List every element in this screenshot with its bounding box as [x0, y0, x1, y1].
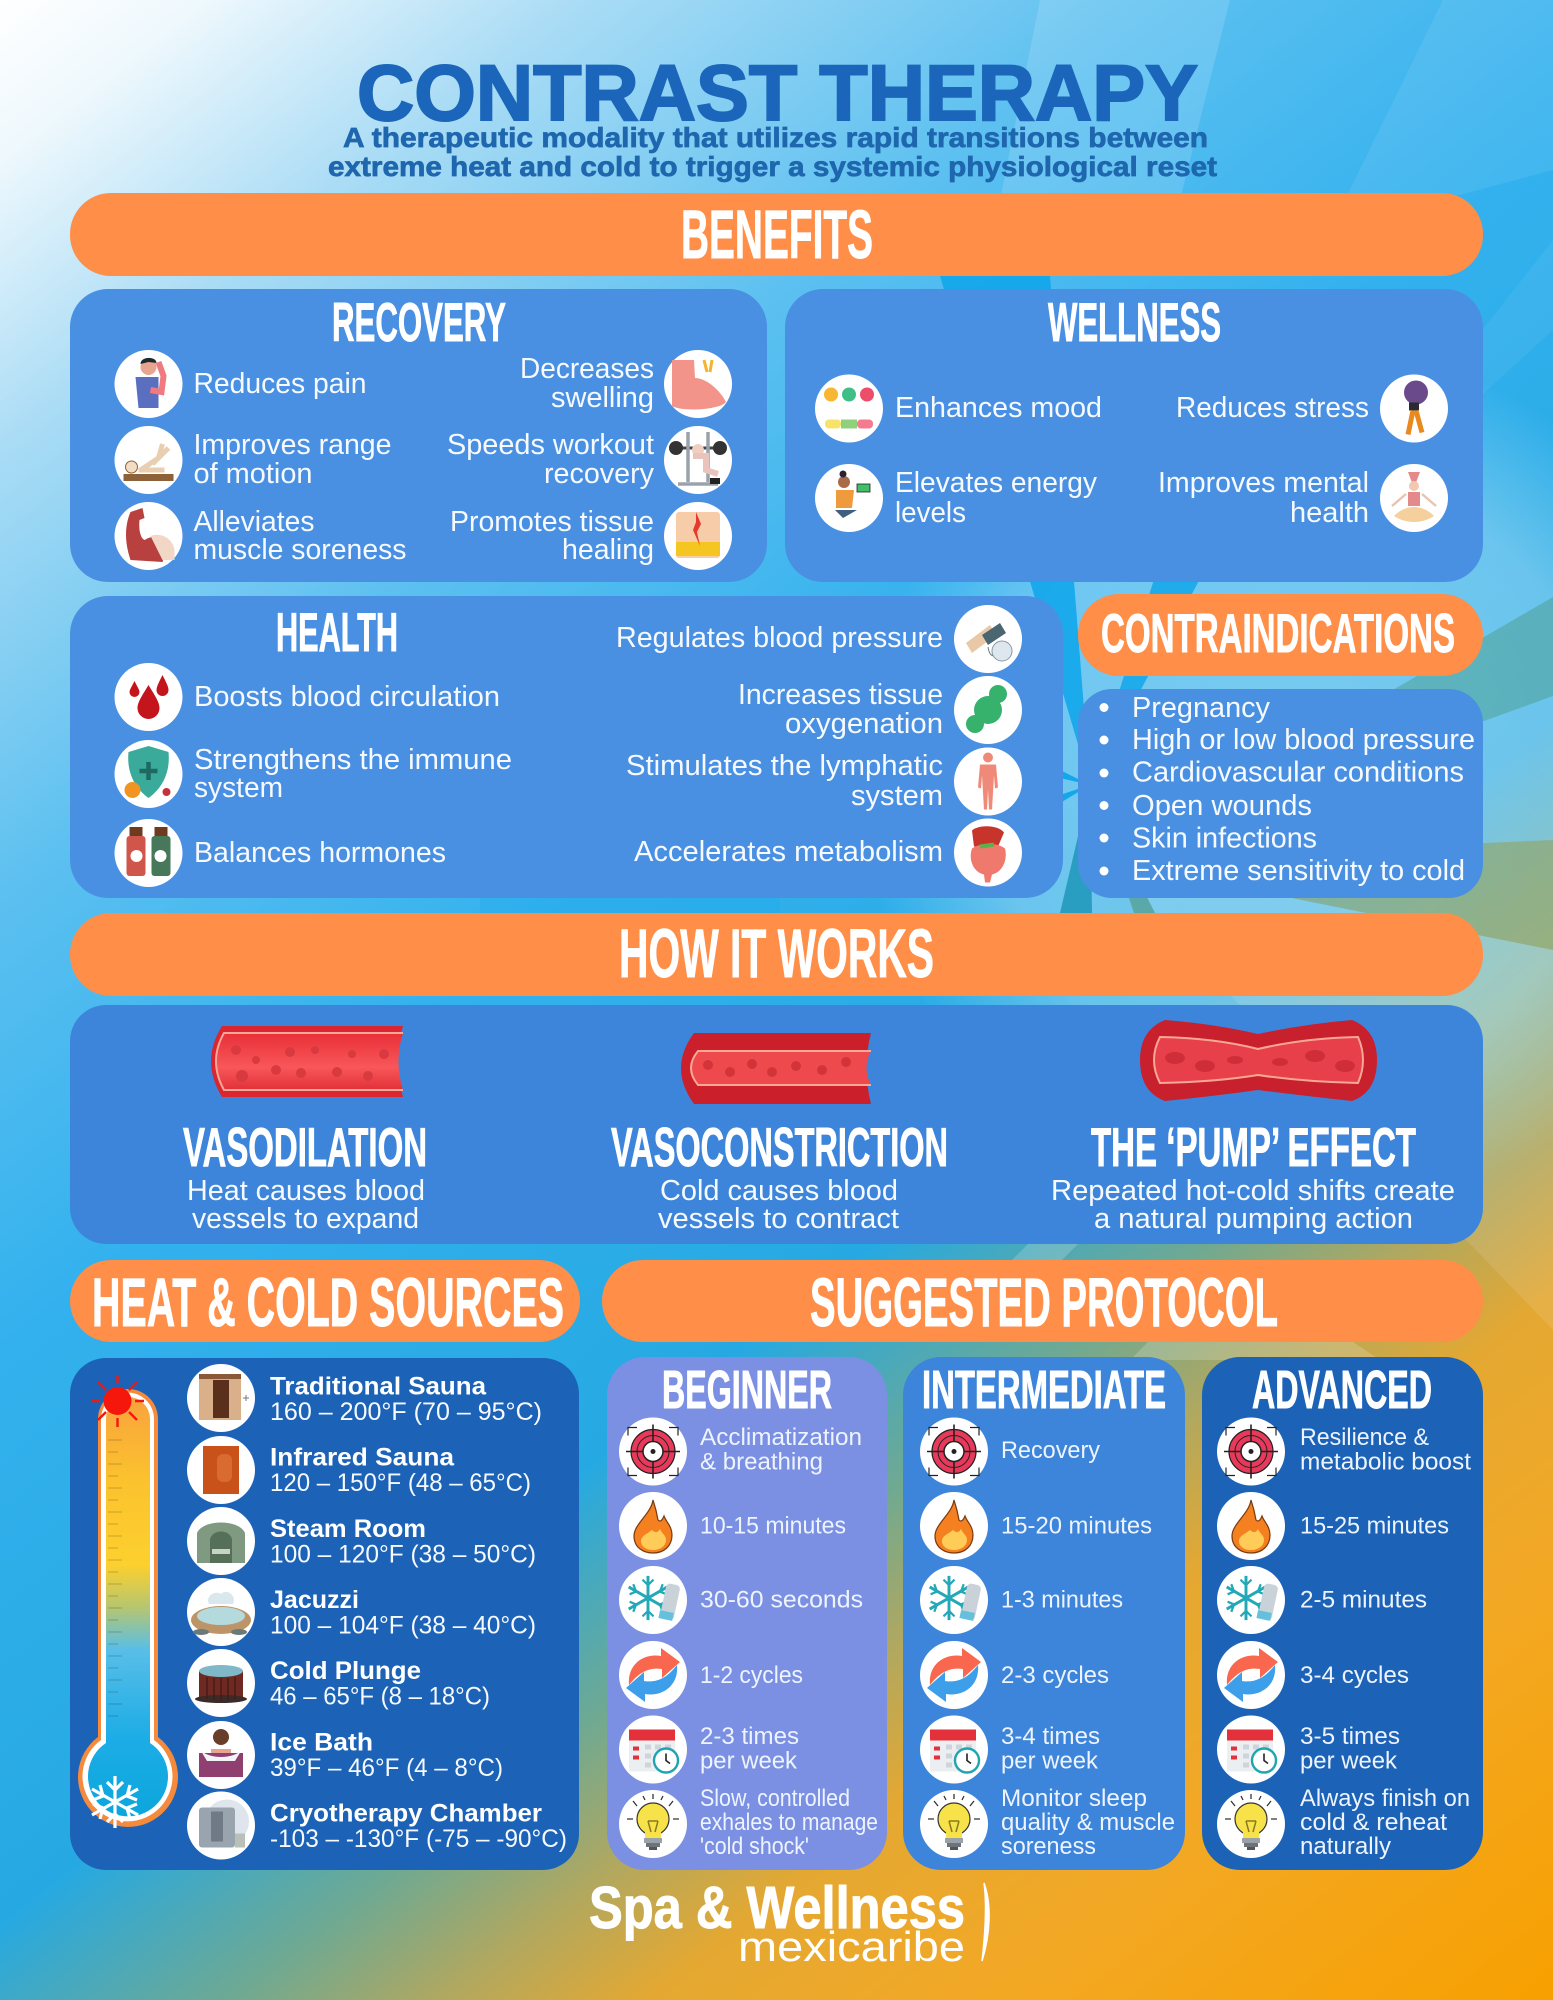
item: cryotherapy chamber: Cryotherapy Chamber	[270, 1800, 542, 1828]
item: ice bath: 39°F – 46°F (4 – 8°C)	[270, 1754, 503, 1782]
column: vasodilation: Heat causes blood	[187, 1175, 425, 1207]
item: promotes tissue healing	[450, 502, 732, 570]
item: decreases swelling: Decreases	[520, 353, 654, 385]
text column: advanced: 3-5 times	[1300, 1723, 1400, 1750]
panel: beginner protocol	[607, 1357, 887, 1870]
item: decreases swelling	[520, 350, 732, 418]
logo: Spa & Wellness	[589, 1875, 965, 1941]
item: improves mental health: health	[1290, 497, 1369, 529]
panel: advanced protocol	[1202, 1357, 1483, 1870]
panel: contraindications list: High or low blood pressure	[1132, 724, 1475, 756]
text column: beginner: 30-60 seconds	[700, 1586, 863, 1614]
item: infrared sauna	[187, 1436, 531, 1504]
text column: beginner: Slow, controlled	[700, 1785, 850, 1812]
panel: health	[70, 596, 1063, 898]
panel: contraindications list: Extreme sensitivity to cold	[1132, 855, 1465, 887]
text column: advanced: cold & reheat	[1300, 1809, 1447, 1836]
panel: contraindications list: Cardiovascular conditions	[1132, 756, 1464, 788]
text column: intermediate: quality & muscle	[1001, 1809, 1175, 1836]
item: reduces stress: Reduces stress	[1176, 392, 1369, 424]
item: reduces stress	[1176, 374, 1448, 442]
subtitle: extreme heat and cold to trigger a systemic physiological reset	[328, 151, 1217, 182]
item: promotes tissue healing: Promotes tissue	[450, 506, 654, 538]
item: alleviates muscle soreness	[114, 502, 406, 570]
illustration: pump effect vessel	[1140, 1020, 1377, 1101]
item: promotes tissue healing: healing	[562, 534, 654, 566]
text column: intermediate: Monitor sleep	[1001, 1785, 1147, 1812]
item: stimulates the lymphatic system: system	[851, 780, 943, 812]
text column: beginner: 1-2 cycles	[700, 1662, 803, 1689]
item: balances hormones	[114, 819, 446, 887]
item: steam room	[187, 1507, 536, 1575]
text column: beginner: 10-15 minutes	[700, 1512, 846, 1540]
item: cold plunge	[187, 1649, 490, 1717]
column: vasoconstriction	[611, 1116, 948, 1235]
icon column: beginner	[619, 1418, 687, 1858]
text column: advanced: Resilience &	[1300, 1424, 1429, 1451]
item: improves range of motion: of motion	[194, 458, 312, 490]
text column: intermediate: per week	[1001, 1748, 1099, 1774]
text column: beginner: & breathing	[700, 1448, 823, 1476]
item: boosts blood circulation	[114, 663, 500, 731]
item: cold plunge: 46 – 65°F (8 – 18°C)	[270, 1682, 490, 1710]
item: decreases swelling: swelling	[551, 382, 654, 414]
heading: wellness: WELLNESS	[1048, 291, 1221, 353]
panel: how it works	[70, 1005, 1483, 1244]
column: vasoconstriction: VASOCONSTRICTION	[611, 1116, 948, 1178]
item: traditional sauna: 160 – 200°F (70 – 95°C)	[270, 1398, 542, 1426]
panel: contraindications list	[1078, 689, 1483, 898]
text column: advanced: metabolic boost	[1300, 1448, 1471, 1476]
banner: heat and cold sources	[70, 1260, 580, 1342]
item: improves range of motion: Improves range	[194, 429, 392, 461]
column: vasoconstriction: Cold causes blood	[660, 1175, 898, 1207]
heading: advanced: ADVANCED	[1252, 1360, 1432, 1420]
item: elevates energy levels: Elevates energy	[895, 467, 1098, 499]
item: elevates energy levels	[815, 464, 1098, 532]
banner: how it works	[70, 913, 1483, 996]
logo	[589, 1875, 989, 1970]
banner: heat and cold sources: HEAT & COLD SOURCES	[92, 1264, 564, 1341]
banner: benefits	[70, 193, 1483, 276]
item: cryotherapy chamber	[187, 1792, 567, 1860]
item: boosts blood circulation: Boosts blood circulation	[194, 681, 500, 713]
item: alleviates muscle soreness: muscle soreness	[194, 534, 406, 566]
item: traditional sauna: Traditional Sauna	[270, 1372, 487, 1400]
thermometer	[78, 1375, 178, 1828]
text column: advanced: Always finish on	[1300, 1785, 1470, 1812]
item: ice bath	[187, 1721, 503, 1789]
text column: intermediate: 1-3 minutes	[1001, 1586, 1123, 1614]
text column: advanced: per week	[1300, 1748, 1398, 1774]
banner: suggested protocol	[602, 1260, 1483, 1342]
heading: recovery: RECOVERY	[332, 291, 506, 353]
subtitle: A therapeutic modality that utilizes rapid transitions between	[343, 122, 1208, 153]
text column: intermediate: soreness	[1001, 1833, 1096, 1860]
illustration: dilated vessel	[211, 1026, 403, 1097]
text column: beginner: 2-3 times	[700, 1723, 799, 1750]
item: stimulates the lymphatic system	[626, 748, 1022, 816]
item: jacuzzi: Jacuzzi	[270, 1586, 359, 1614]
heading: intermediate: INTERMEDIATE	[922, 1360, 1166, 1420]
panel: heat and cold sources	[70, 1358, 579, 1870]
text column: intermediate: 15-20 minutes	[1001, 1512, 1152, 1540]
subtitle	[328, 122, 1217, 182]
text column: beginner: 'cold shock'	[700, 1833, 809, 1860]
text column: advanced	[1300, 1424, 1471, 1860]
item: speeds workout recovery	[447, 426, 732, 494]
title: CONTRAST THERAPY	[357, 48, 1198, 137]
item: increases tissue oxygenation: oxygenation	[785, 708, 943, 740]
item: traditional sauna	[187, 1364, 542, 1432]
panel: contraindications list: Skin infections	[1132, 822, 1317, 854]
item: steam room: 100 – 120°F (38 – 50°C)	[270, 1540, 536, 1568]
item: regulates blood pressure	[616, 605, 1022, 673]
column: pump effect: Repeated hot-cold shifts create	[1051, 1175, 1455, 1207]
item: regulates blood pressure: Regulates blood pressure	[616, 622, 943, 654]
item: increases tissue oxygenation: Increases tissue	[738, 679, 943, 711]
item: cryotherapy chamber: -103 – -130°F (-75 – -90°C)	[270, 1825, 567, 1853]
panel: contraindications list: Open wounds	[1132, 790, 1312, 822]
item: strengthens the immune system: Strengthens the immune	[194, 744, 512, 776]
text column: intermediate: 3-4 times	[1001, 1723, 1100, 1750]
column: vasodilation: vessels to expand	[192, 1203, 419, 1235]
text column: intermediate: 2-3 cycles	[1001, 1662, 1109, 1689]
icon: sun	[91, 1375, 144, 1427]
icon column: advanced	[1217, 1418, 1285, 1858]
logo: mexicaribe	[738, 1923, 965, 1970]
column: vasodilation	[183, 1116, 427, 1235]
item: jacuzzi	[187, 1578, 536, 1646]
item: improves mental health	[1158, 464, 1448, 532]
item: balances hormones: Balances hormones	[194, 837, 446, 869]
item: accelerates metabolism	[634, 818, 1022, 886]
item: stimulates the lymphatic system: Stimulates the lymphatic	[626, 750, 943, 782]
banner: how it works: HOW IT WORKS	[619, 915, 934, 992]
panel: wellness	[785, 289, 1483, 582]
panel: contraindications list: Pregnancy	[1132, 692, 1271, 724]
text column: beginner	[700, 1424, 878, 1860]
text column: beginner: Acclimatization	[700, 1424, 862, 1451]
text column: advanced: 2-5 minutes	[1300, 1586, 1427, 1614]
icon: snowflake	[92, 1776, 138, 1828]
item: speeds workout recovery: recovery	[544, 458, 655, 490]
item: infrared sauna: 120 – 150°F (48 – 65°C)	[270, 1469, 531, 1497]
column: pump effect	[1051, 1116, 1455, 1235]
item: reduces pain: Reduces pain	[194, 368, 366, 400]
item: cold plunge: Cold Plunge	[270, 1657, 421, 1685]
heading: health: HEALTH	[276, 601, 398, 663]
item: elevates energy levels: levels	[895, 497, 966, 529]
item: accelerates metabolism: Accelerates metabolism	[634, 836, 943, 868]
illustration: constricted vessel	[681, 1033, 871, 1104]
item: infrared sauna: Infrared Sauna	[270, 1444, 455, 1472]
text column: intermediate: Recovery	[1001, 1437, 1100, 1464]
text column: advanced: 15-25 minutes	[1300, 1512, 1449, 1540]
item: alleviates muscle soreness: Alleviates	[194, 506, 314, 538]
column: vasoconstriction: vessels to contract	[658, 1203, 899, 1235]
icon column: intermediate	[920, 1418, 988, 1858]
heading: beginner: BEGINNER	[662, 1360, 832, 1420]
item: improves range of motion	[114, 426, 392, 494]
text column: beginner: exhales to manage	[700, 1809, 878, 1836]
item: jacuzzi: 100 – 104°F (38 – 40°C)	[270, 1612, 536, 1640]
item: speeds workout recovery: Speeds workout	[447, 429, 654, 461]
item: ice bath: Ice Bath	[270, 1728, 373, 1756]
banner: benefits: BENEFITS	[681, 196, 873, 273]
item: strengthens the immune system	[114, 740, 512, 808]
item: enhances mood	[815, 374, 1102, 442]
item: strengthens the immune system: system	[194, 772, 283, 804]
item: increases tissue oxygenation	[738, 676, 1022, 744]
text column: advanced: naturally	[1300, 1833, 1391, 1860]
item: reduces pain	[114, 350, 366, 418]
panel: recovery	[70, 289, 767, 582]
text column: intermediate	[1001, 1437, 1175, 1860]
column: pump effect: a natural pumping action	[1094, 1203, 1413, 1235]
item: improves mental health: Improves mental	[1158, 467, 1369, 499]
text column: advanced: 3-4 cycles	[1300, 1662, 1409, 1689]
item: enhances mood: Enhances mood	[895, 392, 1102, 424]
panel: intermediate protocol	[903, 1357, 1185, 1870]
item: steam room: Steam Room	[270, 1515, 426, 1543]
banner: contraindications	[1078, 594, 1483, 676]
text column: beginner: per week	[700, 1748, 798, 1774]
column: vasodilation: VASODILATION	[183, 1116, 427, 1178]
